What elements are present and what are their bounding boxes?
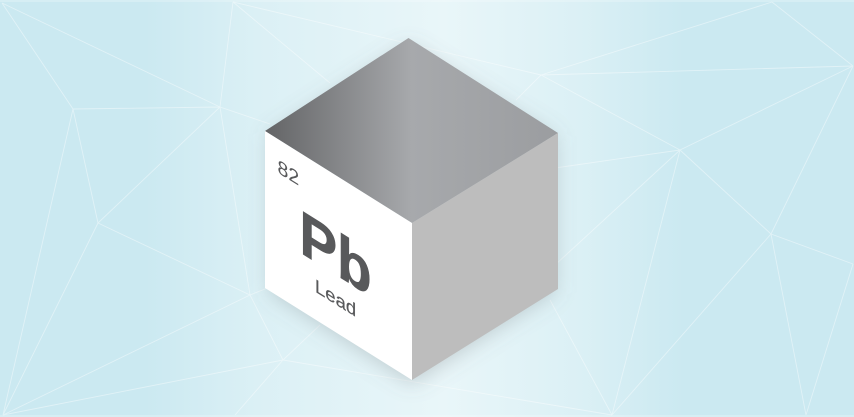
cube	[265, 38, 558, 380]
cube front face	[265, 131, 412, 380]
cube shadow	[270, 45, 555, 384]
atomic number: 82	[278, 155, 299, 191]
cube right face	[412, 133, 558, 380]
element name: Lead	[315, 276, 356, 322]
element symbol: Pb	[300, 197, 372, 311]
cube top face	[265, 38, 558, 223]
